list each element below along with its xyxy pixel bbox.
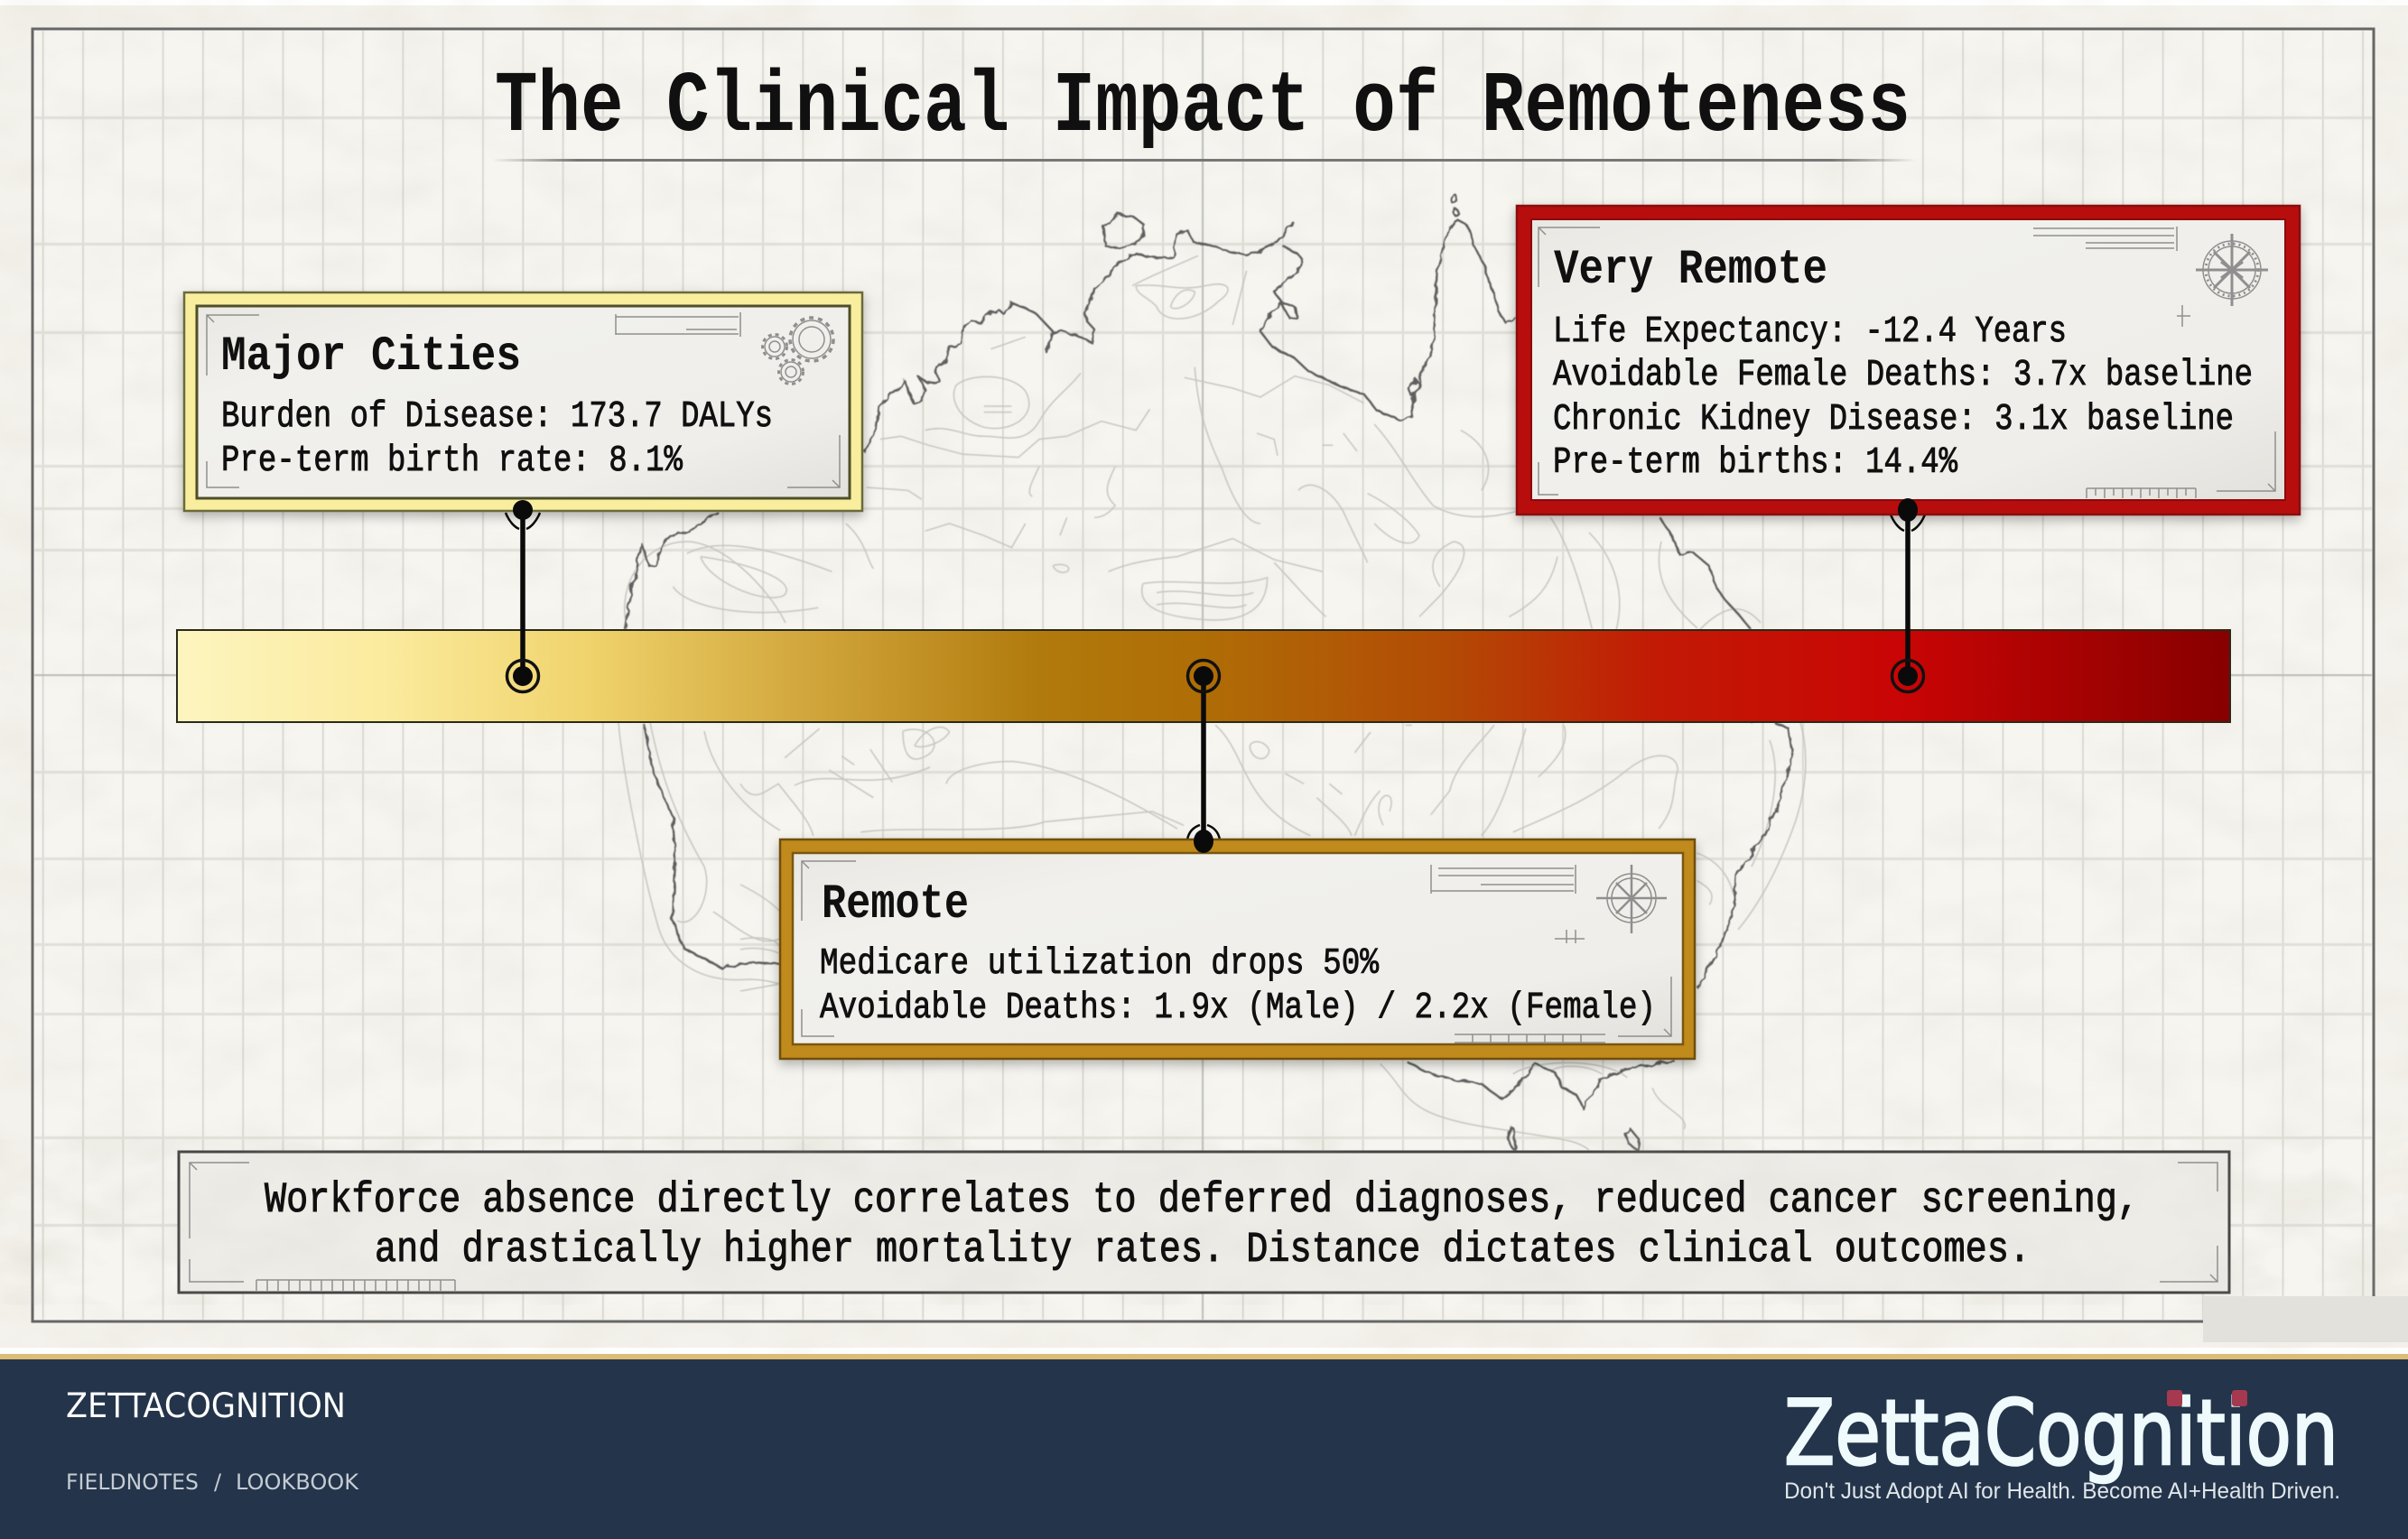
stat: pre-term birth rate: Pre-term birth rate: 8.1%: [221, 440, 683, 482]
contour lines west and east: [618, 533, 1806, 984]
connector: remote: [1187, 661, 1220, 844]
summary text: Workforce absence directly correlates to deferred diagnoses, reduced cancer screening,: [265, 1177, 2139, 1225]
panel: very remote: [1517, 206, 2300, 522]
map of Australia: [618, 194, 1806, 1152]
corner marks: [190, 1163, 2217, 1282]
footer nav: FIELDNOTES: [66, 1469, 199, 1495]
grey corner patch: [2203, 1296, 2408, 1342]
stat: life expectancy: Life Expectancy: -12.4 Years: [1553, 311, 2067, 353]
corner marks: [1539, 227, 2275, 495]
connector: major cities: [506, 499, 540, 691]
summary text second line: and drastically higher mortality rates. Distance dictates clinical outcomes.: [375, 1227, 2031, 1275]
coastline: [625, 194, 1792, 1152]
contour lines north: [673, 255, 1592, 629]
heading: remote: Remote: [822, 877, 969, 932]
blueprint lines: [2033, 227, 2177, 251]
compass icon: [2177, 234, 2268, 327]
gears icon: [762, 318, 833, 385]
corner marks: [802, 861, 1671, 1036]
gradient bar: [177, 630, 2230, 722]
panel: major cities: [184, 292, 862, 520]
footer brand name: ZETTACOGNITION: [66, 1386, 346, 1425]
logo accent: i dots: [2167, 1390, 2247, 1406]
ruler: [256, 1280, 455, 1291]
stat: avoidable deaths: Avoidable Deaths: 1.9x (Male) / 2.2x (Female): [820, 987, 1656, 1029]
compass icon: [1555, 865, 1667, 943]
panel pin: [1194, 830, 1213, 853]
panel pin: [1898, 498, 1918, 522]
footer nav: LOOKBOOK: [236, 1469, 359, 1495]
stat: chronic kidney disease: Chronic Kidney Disease: 3.1x baseline: [1553, 399, 2234, 440]
blueprint bracket: [616, 312, 740, 337]
footer: [0, 1354, 2408, 1539]
logo tagline: Don't Just Adopt AI for Health. Become AI+Health Driven.: [1784, 1479, 2340, 1504]
stat: avoidable female deaths: Avoidable Female Deaths: 3.7x baseline: [1553, 355, 2253, 396]
stat: pre-term births: Pre-term births: 14.4%: [1553, 442, 1957, 484]
ruler: [1455, 1034, 1605, 1043]
blueprint lines: [1431, 865, 1576, 894]
stat: burden of disease: Burden of Disease: 173.7 DALYs: [221, 396, 773, 438]
panel pin: [513, 500, 533, 520]
heading: very remote: Very Remote: [1554, 243, 1827, 298]
stat: medicare utilization: Medicare utilization drops 50%: [820, 943, 1379, 985]
heading: major cities: Major Cities: [221, 329, 521, 385]
panel: remote: [780, 830, 1695, 1059]
ruler: [2087, 488, 2196, 498]
connector: very remote: [1891, 510, 1925, 691]
title: The Clinical Impact of Remoteness: [495, 58, 1911, 156]
corner marks: [207, 315, 840, 487]
contour lines south: [740, 725, 1734, 1150]
title underline: [492, 159, 1916, 162]
panel: summary: [179, 1152, 2229, 1293]
footer nav: /: [214, 1469, 222, 1495]
